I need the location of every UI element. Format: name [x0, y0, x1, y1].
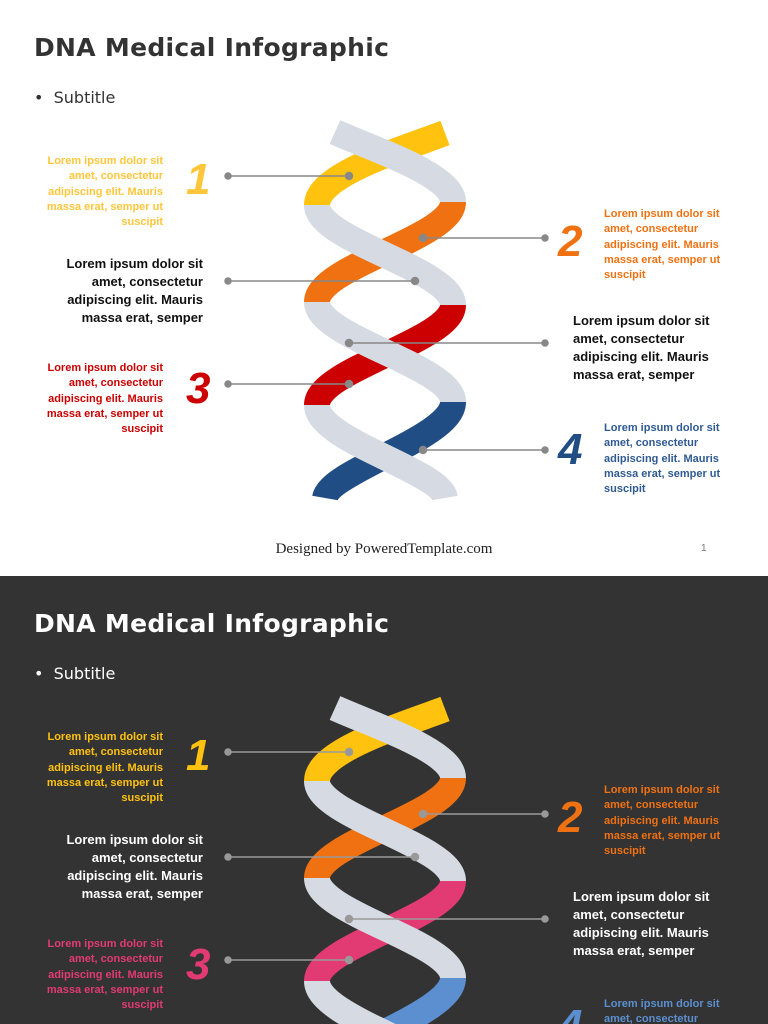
dna helix with connector lines	[224, 120, 549, 500]
number 1: 1	[186, 731, 210, 780]
footer: Designed by PoweredTemplate.com	[276, 541, 492, 557]
number 1: 1	[186, 155, 210, 204]
number 3: 3	[186, 940, 210, 989]
text block 1: Lorem ipsum dolor sit amet, consectetur adipiscing elit. Mauris massa erat, semper ut suscipit	[47, 155, 163, 228]
title: DNA Medical Infographic	[34, 33, 389, 62]
text block 3: Lorem ipsum dolor sit amet, consectetur adipiscing elit. Mauris massa erat, semper ut suscipit	[47, 938, 163, 1011]
text block 4: Lorem ipsum dolor sit amet, consectetur adipiscing elit. Mauris massa erat, semper ut suscipit	[604, 422, 720, 495]
number 2: 2	[558, 217, 582, 266]
number 3: 3	[186, 364, 210, 413]
black text right: Lorem ipsum dolor sit amet, consectetur adipiscing elit. Mauris massa erat, semper	[573, 313, 710, 382]
text block 1: Lorem ipsum dolor sit amet, consectetur adipiscing elit. Mauris massa erat, semper ut suscipit	[47, 731, 163, 804]
number 2: 2	[558, 793, 582, 842]
white text right: Lorem ipsum dolor sit amet, consectetur adipiscing elit. Mauris massa erat, semper	[573, 889, 710, 958]
subtitle: • Subtitle	[34, 664, 115, 683]
white text left: Lorem ipsum dolor sit amet, consectetur adipiscing elit. Mauris massa erat, semper	[66, 832, 203, 901]
number 4: 4	[558, 425, 582, 474]
black text left: Lorem ipsum dolor sit amet, consectetur adipiscing elit. Mauris massa erat, semper	[66, 256, 203, 325]
title: DNA Medical Infographic	[34, 609, 389, 638]
subtitle: • Subtitle	[34, 88, 115, 107]
text block 3: Lorem ipsum dolor sit amet, consectetur adipiscing elit. Mauris massa erat, semper ut suscipit	[47, 362, 163, 435]
slide: dark	[0, 576, 768, 1024]
text block 2: Lorem ipsum dolor sit amet, consectetur adipiscing elit. Mauris massa erat, semper ut suscipit	[604, 784, 720, 857]
dna helix with connector lines	[224, 696, 549, 1024]
text block 2: Lorem ipsum dolor sit amet, consectetur adipiscing elit. Mauris massa erat, semper ut suscipit	[604, 208, 720, 281]
page number: 1	[701, 543, 707, 554]
slide: light	[0, 0, 768, 576]
